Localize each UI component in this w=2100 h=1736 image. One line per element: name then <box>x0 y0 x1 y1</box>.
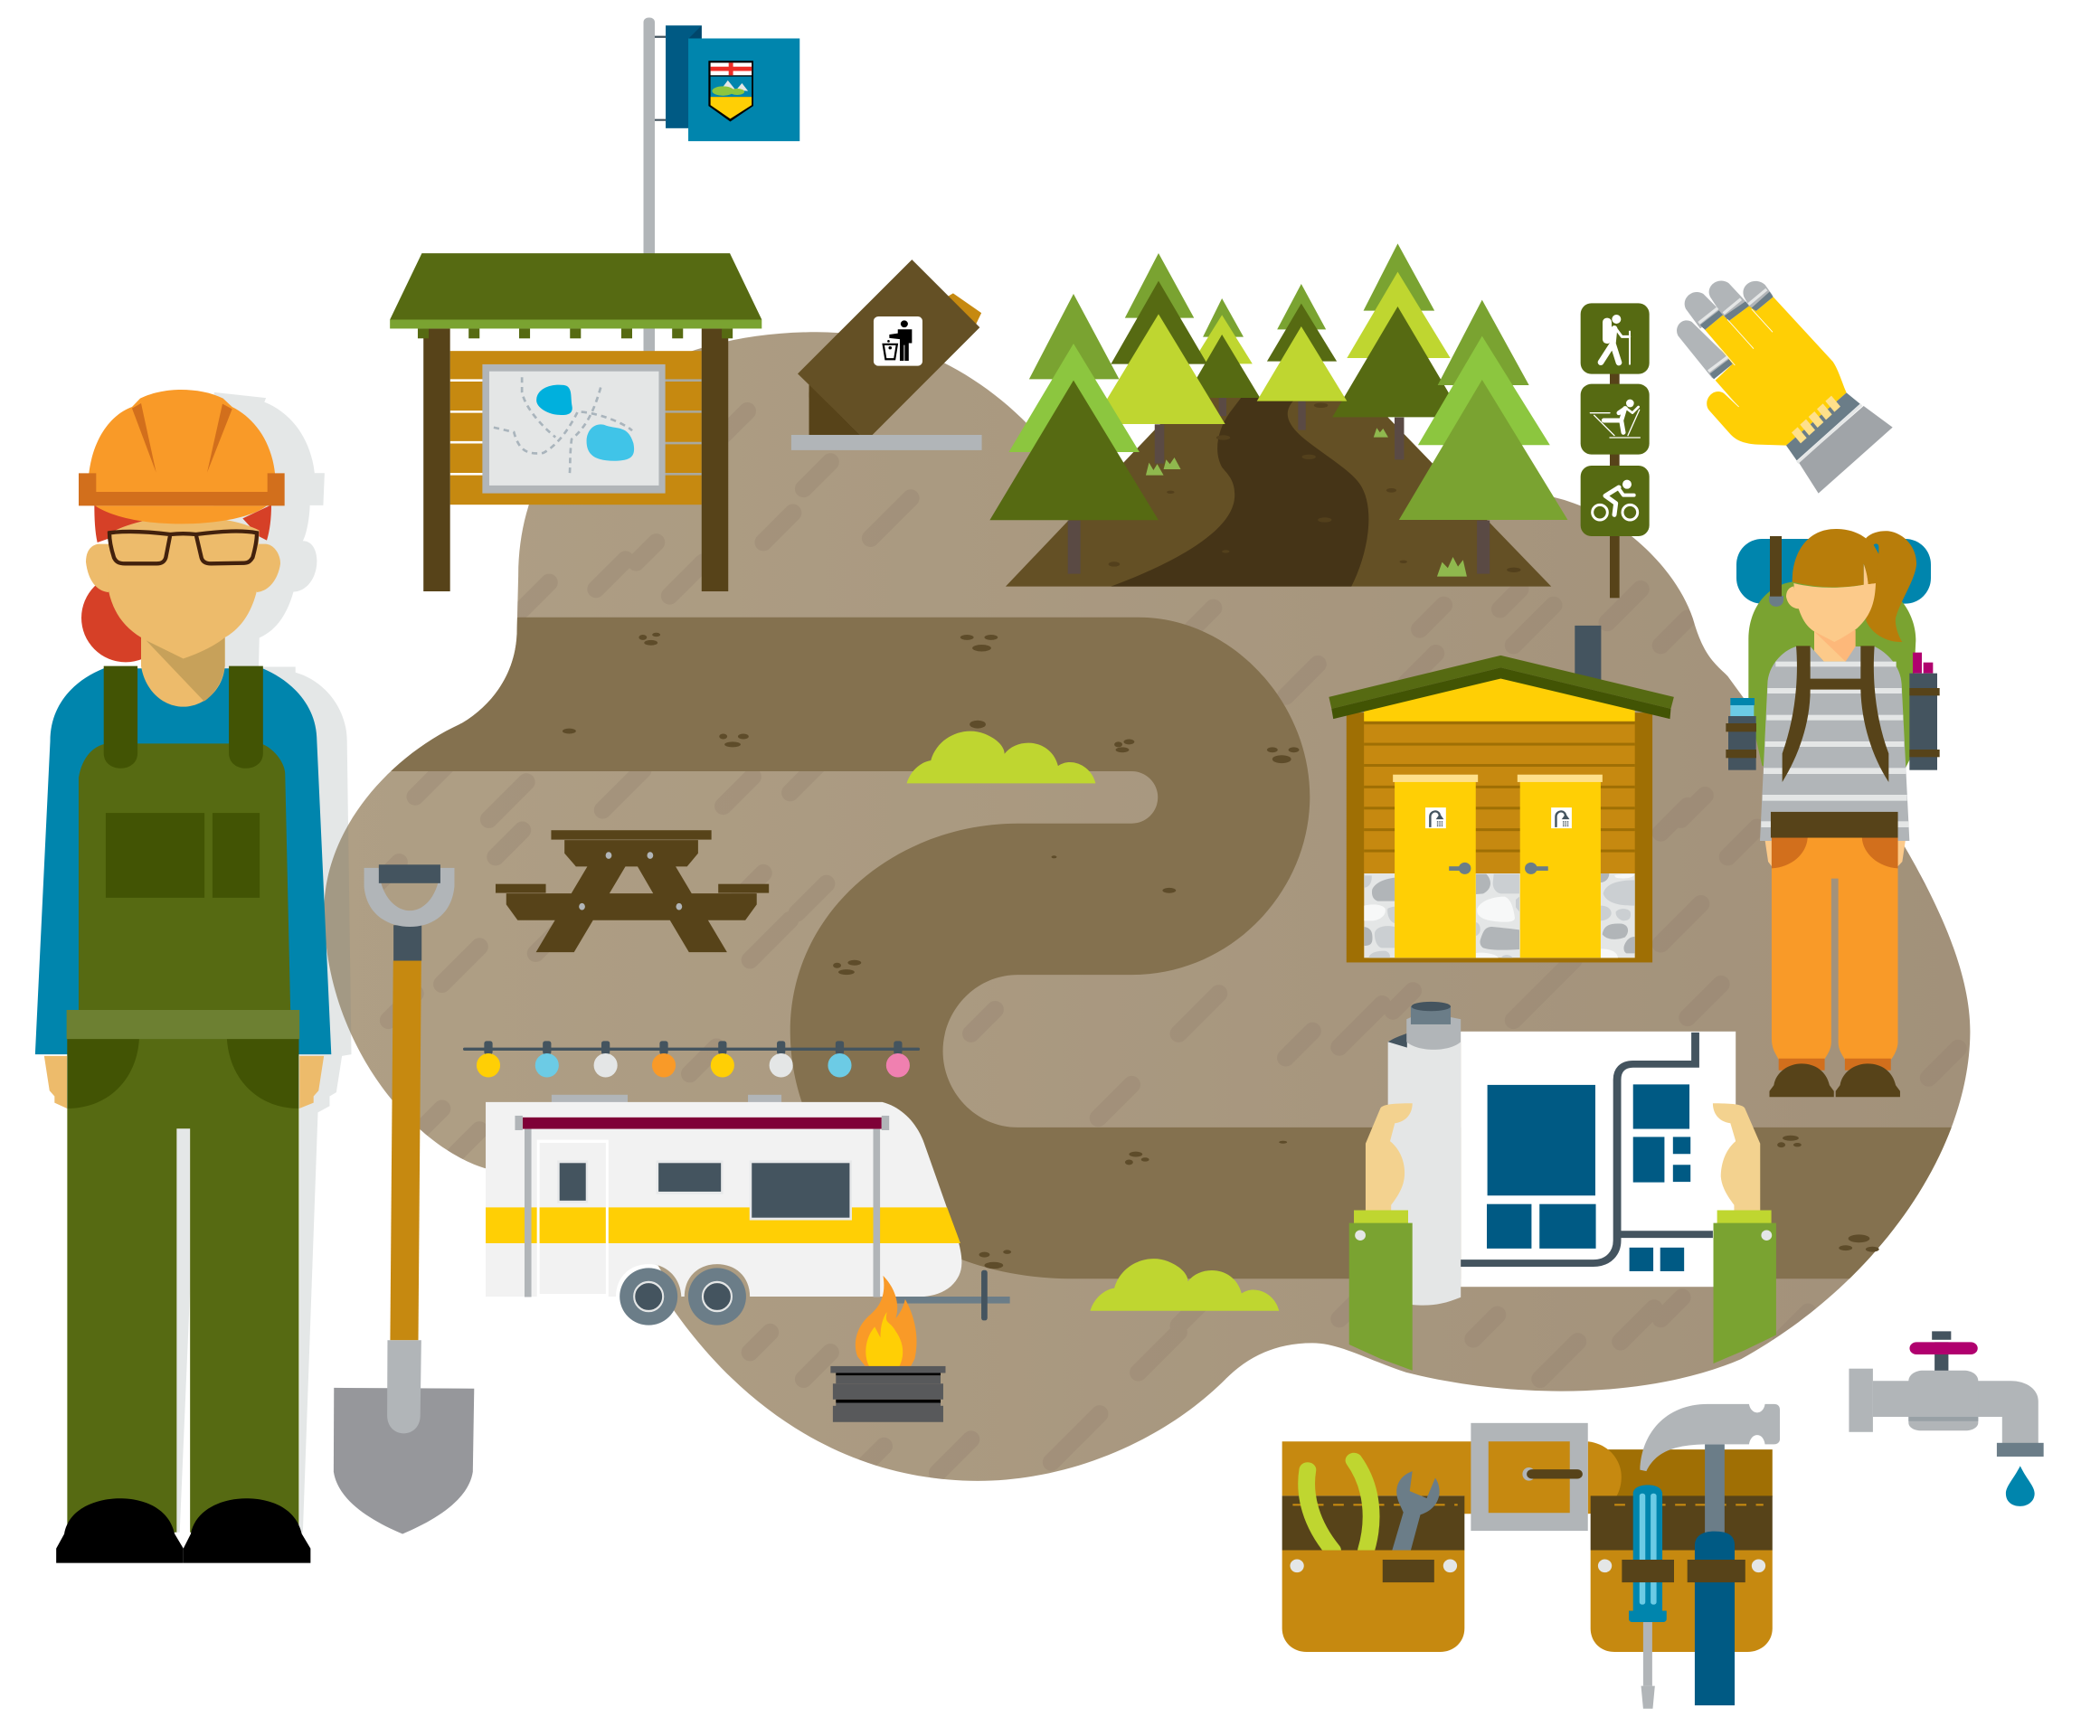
worker shadow <box>176 392 351 1533</box>
picnic table <box>496 830 769 952</box>
ground area <box>324 332 1970 1481</box>
bush upper <box>907 731 1095 783</box>
winding road <box>362 618 1982 1278</box>
tree middle <box>1257 284 1347 401</box>
ground blob with winding road <box>324 332 1982 1481</box>
tool belt <box>1282 1404 1780 1709</box>
worker head with hard hat and glasses <box>79 390 285 707</box>
water bottle right <box>1909 653 1940 770</box>
kiosk posts <box>423 328 728 591</box>
icon: cyclist <box>1593 480 1638 520</box>
kiosk map board <box>450 351 702 505</box>
icon: shower right <box>1551 807 1572 828</box>
campfire <box>830 1276 945 1422</box>
forest and trail <box>989 243 1567 587</box>
tree small back <box>1185 298 1260 398</box>
backpacker <box>1726 529 1940 1097</box>
kiosk roof <box>390 253 761 338</box>
icon: hiker <box>1601 315 1630 364</box>
flag and information kiosk and trash bin <box>390 18 982 591</box>
water bottle left <box>1726 698 1756 770</box>
trail signs and work glove <box>1581 281 1893 598</box>
grass tufts <box>1146 428 1467 577</box>
shovel <box>334 864 474 1533</box>
trash bin <box>791 259 982 450</box>
tree tall right <box>1332 243 1463 417</box>
stone foundation <box>1364 873 1635 958</box>
tree tall left <box>1092 253 1225 424</box>
worker with shovel <box>35 390 474 1563</box>
icon: shower left <box>1425 807 1446 828</box>
camper trailer <box>486 1095 1010 1326</box>
string lights <box>464 1041 919 1077</box>
tree trunks <box>1068 398 1490 574</box>
tree front right <box>1399 300 1567 520</box>
trail signpost <box>1581 303 1650 598</box>
bush lower <box>1090 1259 1279 1311</box>
water tap <box>1849 1331 2044 1506</box>
hillside <box>1006 398 1551 587</box>
picnic table, string lights, camper and fire pit <box>464 830 1010 1422</box>
worker body <box>35 666 331 1563</box>
shower building <box>1329 626 1674 962</box>
backpacker legs <box>1765 812 1906 1097</box>
shower doors <box>1393 775 1603 958</box>
belt buckle <box>1471 1423 1588 1531</box>
backpacker upper body and pack <box>1726 529 1940 841</box>
blueprint, tool belt and water tap <box>1282 1002 2044 1709</box>
icon: water drop <box>2006 1466 2035 1506</box>
flag pole <box>643 18 655 354</box>
hammer <box>1640 1404 1780 1705</box>
icon: skier <box>1590 400 1640 438</box>
tree front left <box>989 294 1159 520</box>
screwdriver <box>1629 1485 1667 1709</box>
blueprint held in hands <box>1349 1002 1776 1371</box>
pliers and wrench <box>1307 1460 1440 1551</box>
work glove <box>1677 281 1893 494</box>
Alberta flag <box>655 25 799 141</box>
trail <box>1111 398 1368 587</box>
